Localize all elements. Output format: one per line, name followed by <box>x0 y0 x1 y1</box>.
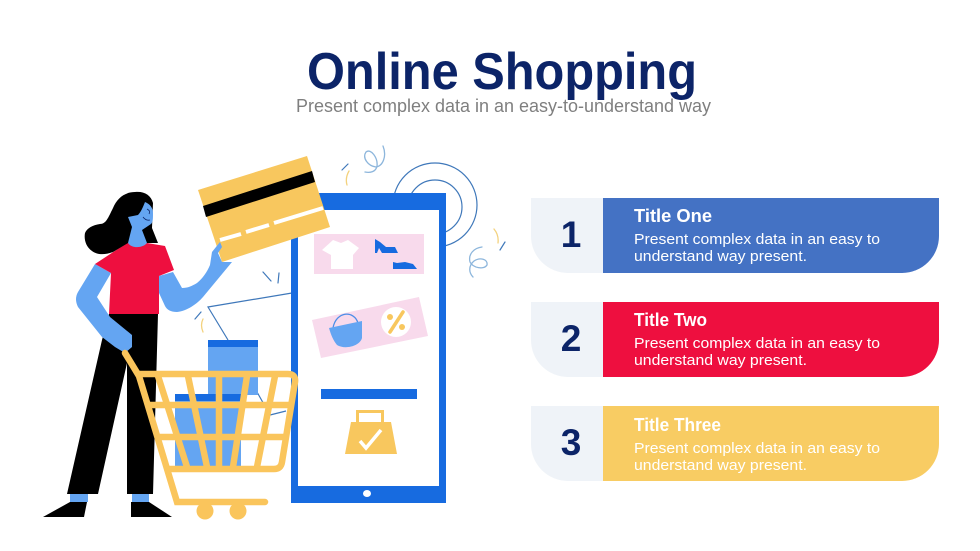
description 1: understand way present. <box>634 248 807 265</box>
subtitle: Present complex data in an easy-to-understand way <box>296 96 711 116</box>
heading: title two: Title Two <box>634 310 707 330</box>
panel: item 3 <box>531 406 939 481</box>
smartphone <box>291 193 446 503</box>
decorative concentric circles <box>393 163 477 247</box>
title: Online Shopping <box>307 43 697 101</box>
number 1: 1 <box>561 214 581 255</box>
description 2: Present complex data in an easy to <box>634 335 880 352</box>
number 3: 3 <box>561 422 581 463</box>
facial features <box>143 209 150 220</box>
description 2: understand way present. <box>634 352 807 369</box>
woman <box>43 192 232 517</box>
illustration: online shopping scene <box>43 146 505 520</box>
product bar <box>321 389 417 399</box>
shopping cart <box>125 353 295 520</box>
shopping boxes <box>175 340 258 466</box>
description 3: Present complex data in an easy to <box>634 440 880 457</box>
panel: item 1 <box>531 198 939 273</box>
ankles <box>70 494 149 502</box>
product tile: bag and discount <box>312 297 428 358</box>
open box flap outline <box>208 293 292 415</box>
product tile: clothes and shoes <box>314 234 424 274</box>
hair <box>85 192 158 254</box>
left arm <box>76 264 132 353</box>
heading: title one: Title One <box>634 206 712 226</box>
home button <box>363 490 371 497</box>
description 3: understand way present. <box>634 457 807 474</box>
neck and face <box>128 202 153 247</box>
credit card <box>198 156 330 262</box>
shoes <box>43 502 172 517</box>
heading: title three: Title Three <box>634 415 721 435</box>
wheels <box>196 502 246 520</box>
panel: item 2 <box>531 302 939 377</box>
red shirt <box>95 243 174 314</box>
number 2: 2 <box>561 318 581 359</box>
confetti squiggles and ticks <box>195 146 505 332</box>
pants <box>67 314 158 494</box>
description 1: Present complex data in an easy to <box>634 231 880 248</box>
right arm and hand <box>159 242 232 312</box>
icon: shopping bag with check <box>345 412 397 454</box>
